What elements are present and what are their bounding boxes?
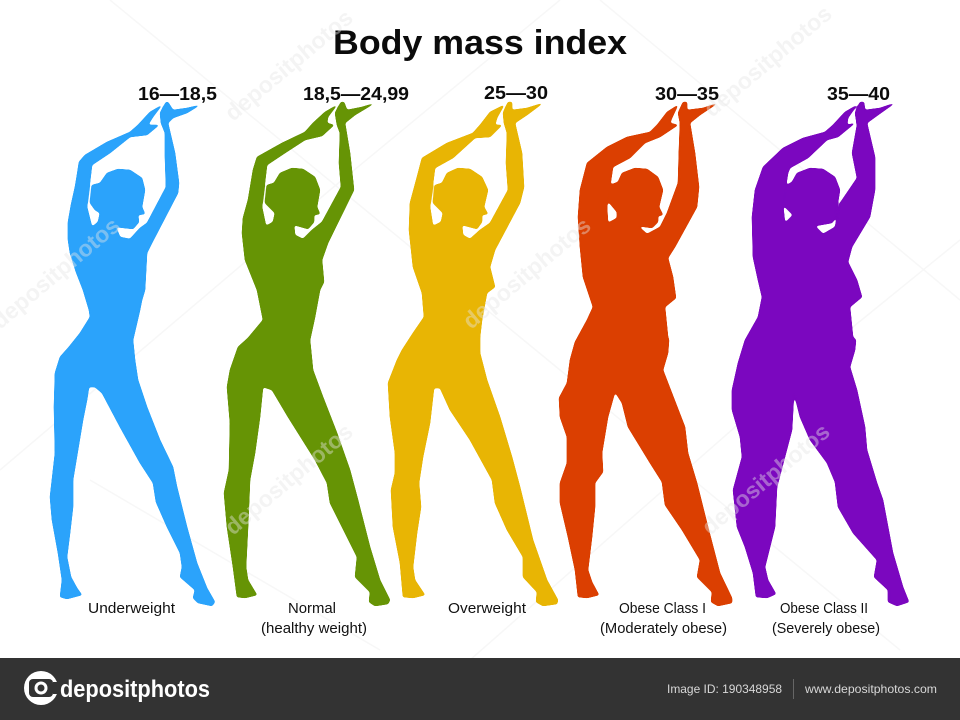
figure: obese class I silhouette bbox=[559, 102, 732, 606]
brand name: depositphotos bbox=[60, 676, 210, 703]
watermark text: depositphotos bbox=[699, 0, 837, 122]
watermark text bbox=[0, 0, 837, 540]
image id: Image ID: 190348958 bbox=[667, 682, 782, 696]
watermark text: depositphotos bbox=[220, 418, 358, 540]
icon: camera logo bbox=[24, 671, 59, 705]
website url: www.depositphotos.com bbox=[804, 682, 937, 696]
BMI range: obese class I: 30—35 bbox=[655, 83, 719, 104]
watermark text: depositphotos bbox=[458, 212, 596, 334]
label: overweight: Overweight bbox=[448, 600, 527, 617]
label: obese class I bbox=[600, 600, 727, 637]
title: Body mass index bbox=[333, 24, 627, 62]
BMI range: obese class II: 35—40 bbox=[827, 83, 890, 104]
footer bar bbox=[0, 658, 960, 720]
BMI range: normal: 18,5—24,99 bbox=[303, 83, 409, 104]
figure: overweight silhouette bbox=[388, 102, 558, 606]
label: normal bbox=[261, 600, 367, 637]
BMI range: underweight: 16—18,5 bbox=[138, 83, 217, 104]
label: obese class II: Obese Class II bbox=[780, 600, 868, 617]
label: normal: Normal bbox=[288, 600, 336, 617]
figure: underweight silhouette bbox=[50, 102, 215, 606]
label: obese class II bbox=[772, 600, 880, 637]
figure: normal weight silhouette bbox=[224, 102, 390, 606]
label: normal: (healthy weight) bbox=[261, 620, 367, 637]
label: obese class I: (Moderately obese) bbox=[600, 620, 727, 637]
label: underweight: Underweight bbox=[88, 600, 176, 617]
label: obese class I: Obese Class I bbox=[619, 600, 706, 617]
watermark text: depositphotos bbox=[220, 4, 358, 126]
figure: obese class II silhouette bbox=[732, 102, 909, 606]
label: obese class II: (Severely obese) bbox=[772, 620, 880, 637]
watermark text: depositphotos bbox=[697, 418, 835, 540]
BMI range: overweight: 25—30 bbox=[484, 82, 548, 103]
